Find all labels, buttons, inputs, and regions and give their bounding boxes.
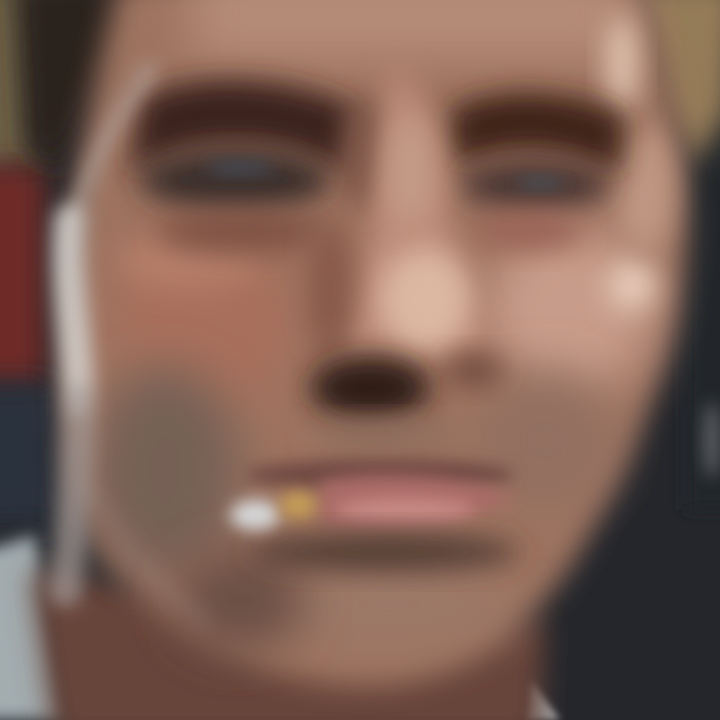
cigarette xyxy=(230,492,316,530)
background xyxy=(0,0,720,522)
shirt xyxy=(0,535,560,720)
white smoke streak xyxy=(39,60,162,615)
hair xyxy=(15,0,720,170)
brow and eye: right xyxy=(450,94,625,250)
neck xyxy=(30,570,545,720)
brow and eye: left xyxy=(130,80,387,254)
nose xyxy=(308,70,505,449)
mouth xyxy=(245,459,520,570)
